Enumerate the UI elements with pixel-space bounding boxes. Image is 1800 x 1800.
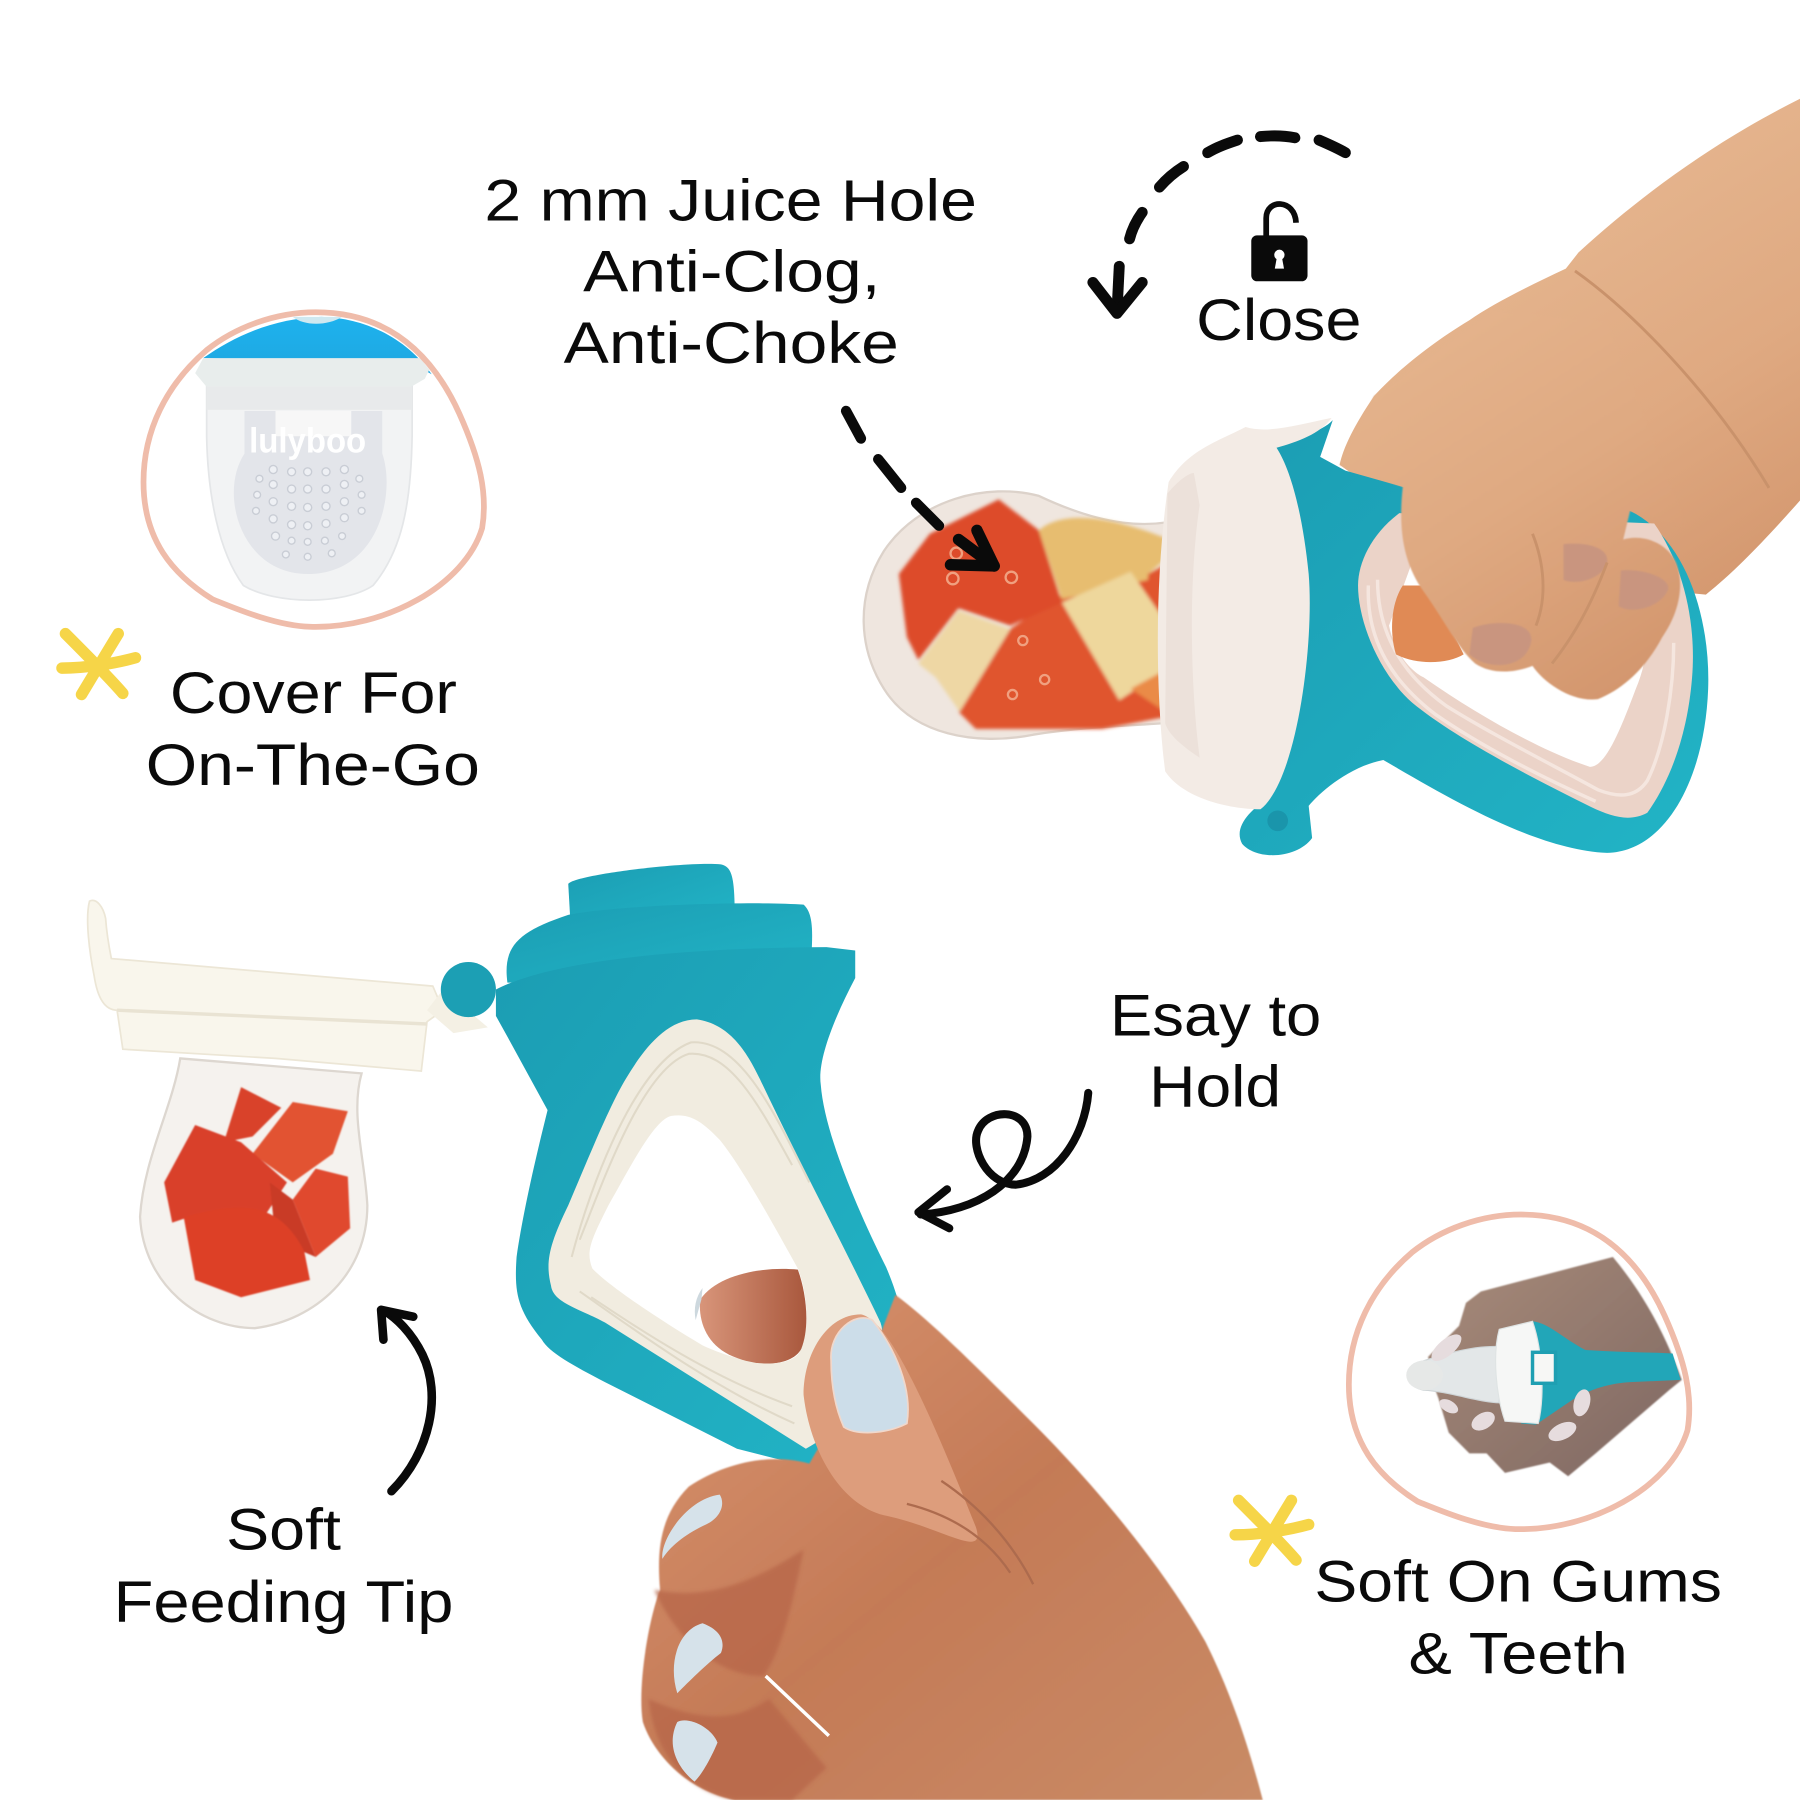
cover dots <box>253 465 365 560</box>
cover rim <box>195 358 429 387</box>
fingernail sliver <box>695 1288 703 1320</box>
baby hand creases <box>1533 271 1769 664</box>
arrow: dashed to juice hole <box>846 411 994 566</box>
baby fingernails <box>1469 544 1668 665</box>
feeder teal handle <box>1240 420 1708 855</box>
caption: easy to hold: Hold <box>1149 1055 1281 1120</box>
thumb crease <box>907 1481 1033 1584</box>
panel: cover for on-the-go <box>143 312 484 627</box>
fruit pieces <box>164 1087 350 1297</box>
gums outline blob <box>1349 1215 1689 1529</box>
caption: easy to hold <box>1110 983 1321 1120</box>
icon: yellow star right <box>1235 1500 1309 1561</box>
cover outline blob <box>143 312 484 627</box>
cover logo: lulyboo <box>249 420 366 460</box>
feeder hinge link <box>427 990 488 1033</box>
caption: juice hole: Anti-Choke <box>564 311 899 376</box>
caption: soft on gums <box>1314 1549 1722 1687</box>
cover cap blue <box>203 317 432 374</box>
feeder hinge dimple <box>1267 810 1288 831</box>
caption: juice hole: 2 mm Juice Hole <box>484 168 977 233</box>
feeder clear bulb <box>140 1058 367 1328</box>
small feeder white collar <box>1496 1321 1542 1423</box>
feeder grip ribs <box>572 1042 809 1423</box>
thumb nail <box>831 1318 908 1433</box>
cover body <box>207 385 412 600</box>
arrow: dashed curve closing <box>1093 136 1345 313</box>
caption: soft on gums: Soft On Gums <box>1314 1549 1722 1614</box>
feeder grip hole <box>1389 540 1648 767</box>
panel: soft on gums <box>1349 1215 1689 1529</box>
cover tab <box>276 411 351 436</box>
feeder teal top discs <box>507 864 812 983</box>
baby arm behind handle <box>1340 99 1800 595</box>
feeder open tip cap <box>88 900 443 1071</box>
caption: soft feeding tip <box>114 1498 453 1635</box>
caption: soft feeding tip: Feeding Tip <box>114 1570 453 1635</box>
feeder collar shading <box>1165 473 1200 758</box>
small feeder teal handle <box>1521 1321 1681 1425</box>
cover cap notch <box>293 317 342 324</box>
caption: soft feeding tip: Soft <box>226 1498 341 1563</box>
small hand <box>1428 1257 1682 1476</box>
small fingernails <box>1427 1330 1593 1445</box>
thumb <box>804 1314 978 1542</box>
cover band <box>207 387 412 410</box>
feeder white collar <box>1158 418 1332 809</box>
caption: soft on gums: & Teeth <box>1409 1622 1628 1687</box>
caption: close: Close <box>1196 288 1361 353</box>
feeder cream grip <box>549 1019 883 1449</box>
small feeder clear teat <box>1408 1346 1499 1403</box>
baby fist front <box>1340 310 1688 700</box>
feeder grip ring <box>1358 513 1693 818</box>
palm and back of hand <box>641 1295 1263 1800</box>
feeder hinge knob <box>441 962 496 1017</box>
feeder grip ribs <box>1368 580 1674 801</box>
caption: cover <box>146 661 480 798</box>
photo: baby hand holding feeder <box>864 99 1800 855</box>
caption: juice hole <box>484 168 977 376</box>
cover inner teat panel <box>234 411 387 574</box>
arrow: looped to handle <box>918 1093 1088 1228</box>
arrow: curved to feeding tip <box>381 1310 432 1491</box>
gap between fingers <box>766 1676 829 1736</box>
icon: open padlock <box>1251 204 1308 281</box>
caption: cover: Cover For <box>170 661 457 726</box>
icon: yellow star left <box>62 634 135 695</box>
small feeder clip <box>1533 1352 1555 1383</box>
small feeder tip <box>1406 1360 1443 1390</box>
caption: easy to hold: Esay to <box>1110 983 1321 1048</box>
caption: cover: On-The-Go <box>146 733 480 798</box>
feeder grip hole <box>590 1115 806 1363</box>
feeder silicone bulb with fruit <box>864 491 1201 739</box>
finger shading <box>649 1550 827 1800</box>
finger through handle <box>700 1269 806 1364</box>
feeder teal body <box>496 947 907 1467</box>
caption: juice hole: Anti-Clog, <box>583 240 880 305</box>
fingernails <box>662 1495 723 1782</box>
baby finger through handle <box>1392 585 1464 662</box>
photo: adult hand holding open feeder <box>88 864 1263 1800</box>
